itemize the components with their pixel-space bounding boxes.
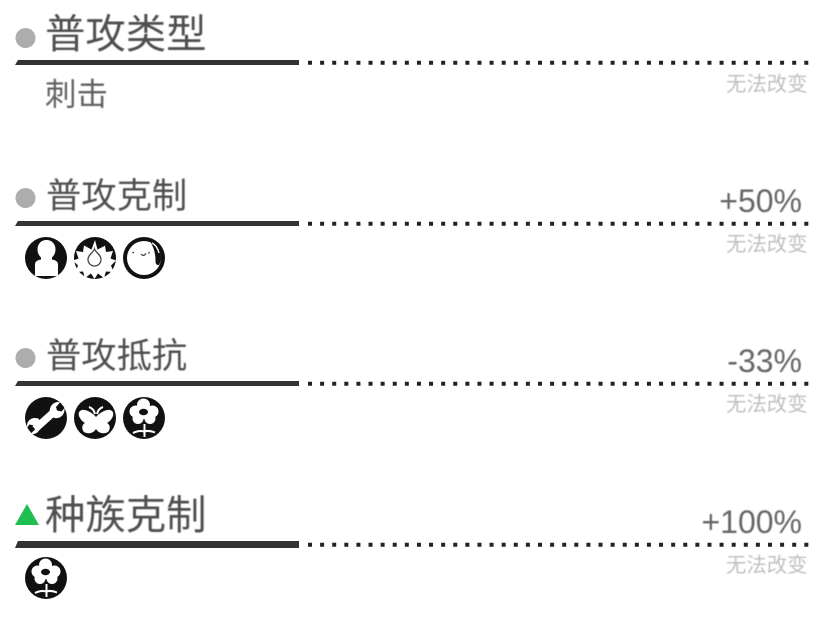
divider line [15,381,809,386]
bullet: grey circle [16,28,36,48]
note: 无法改变: 无法改变 [726,233,808,256]
divider line [15,60,809,65]
note: 无法改变: 无法改变 [726,393,808,416]
note: 无法改变: 无法改变 [726,554,808,577]
icon: person [25,237,67,279]
heading: 普攻抵抗: 普攻抵抗 [46,337,187,376]
value: +50%: +50% [719,183,802,219]
icon: smiling blob [123,237,165,279]
icon: flower [25,557,67,599]
icon: wrench [25,397,67,439]
heading: 普攻类型: 普攻类型 [45,11,207,57]
value: +100%: +100% [701,504,802,540]
icon: spiky sun [73,237,116,279]
note: 无法改变: 无法改变 [726,73,808,96]
panel: 种族克制 [15,492,809,599]
value: -33%: -33% [727,343,802,379]
bullet: grey circle [16,188,36,208]
panel: 普攻类型 [15,11,809,112]
heading: 种族克制: 种族克制 [45,492,207,538]
icon: butterfly [74,397,116,439]
divider line [15,221,809,226]
icon: flower [123,397,165,439]
heading: 普攻克制: 普攻克制 [46,177,187,216]
panel: 普攻抵抗 [15,337,809,439]
divider line [15,541,809,548]
panel: 普攻克制 [15,177,809,279]
attack type: 刺击: 刺击 [45,76,108,112]
bullet: green triangle [15,504,39,525]
bullet: grey circle [16,348,36,368]
